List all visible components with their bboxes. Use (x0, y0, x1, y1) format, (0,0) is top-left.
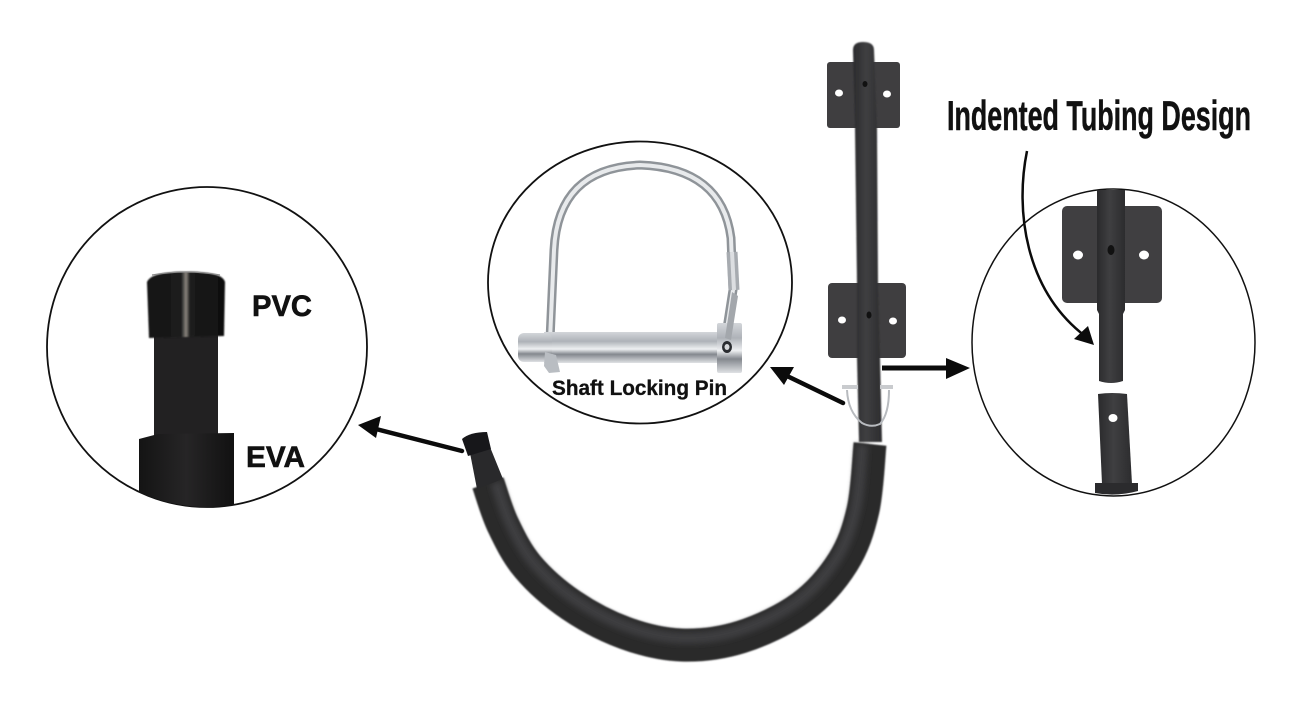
EVA grip section (139, 433, 234, 510)
screw holes (835, 90, 843, 96)
panel: indented tubing detail circle (972, 189, 1255, 496)
plate screw holes (1073, 250, 1083, 260)
arrow: pin to locking pin circle (770, 367, 843, 403)
icon: pin body (518, 292, 742, 373)
icon: wire shackle (549, 165, 734, 362)
label: EVA: EVA (246, 441, 305, 474)
lower plate (828, 283, 906, 358)
label: shaft locking pin: Shaft Locking Pin (552, 377, 727, 400)
upper plate (827, 62, 900, 128)
arrow: tip to PVC circle (358, 416, 462, 451)
tube section (154, 330, 218, 438)
panel: PVC and EVA detail circle (47, 187, 367, 510)
panel: shaft locking pin circle (488, 142, 792, 424)
arrow: shaft to tubing circle (882, 358, 970, 379)
small locking pin (842, 387, 893, 426)
lower tube (1098, 393, 1132, 484)
curved arrow: heading to indent (1023, 151, 1094, 345)
thin tip section (470, 447, 503, 489)
mounting plate (1062, 206, 1162, 303)
shaft (853, 42, 882, 442)
upper tube with indented end (1097, 190, 1125, 383)
wall mount bar (827, 42, 906, 442)
label: PVC: PVC (252, 290, 312, 323)
hanger tube (462, 432, 870, 645)
PVC end cap (147, 272, 225, 338)
black tip cap (462, 432, 491, 456)
